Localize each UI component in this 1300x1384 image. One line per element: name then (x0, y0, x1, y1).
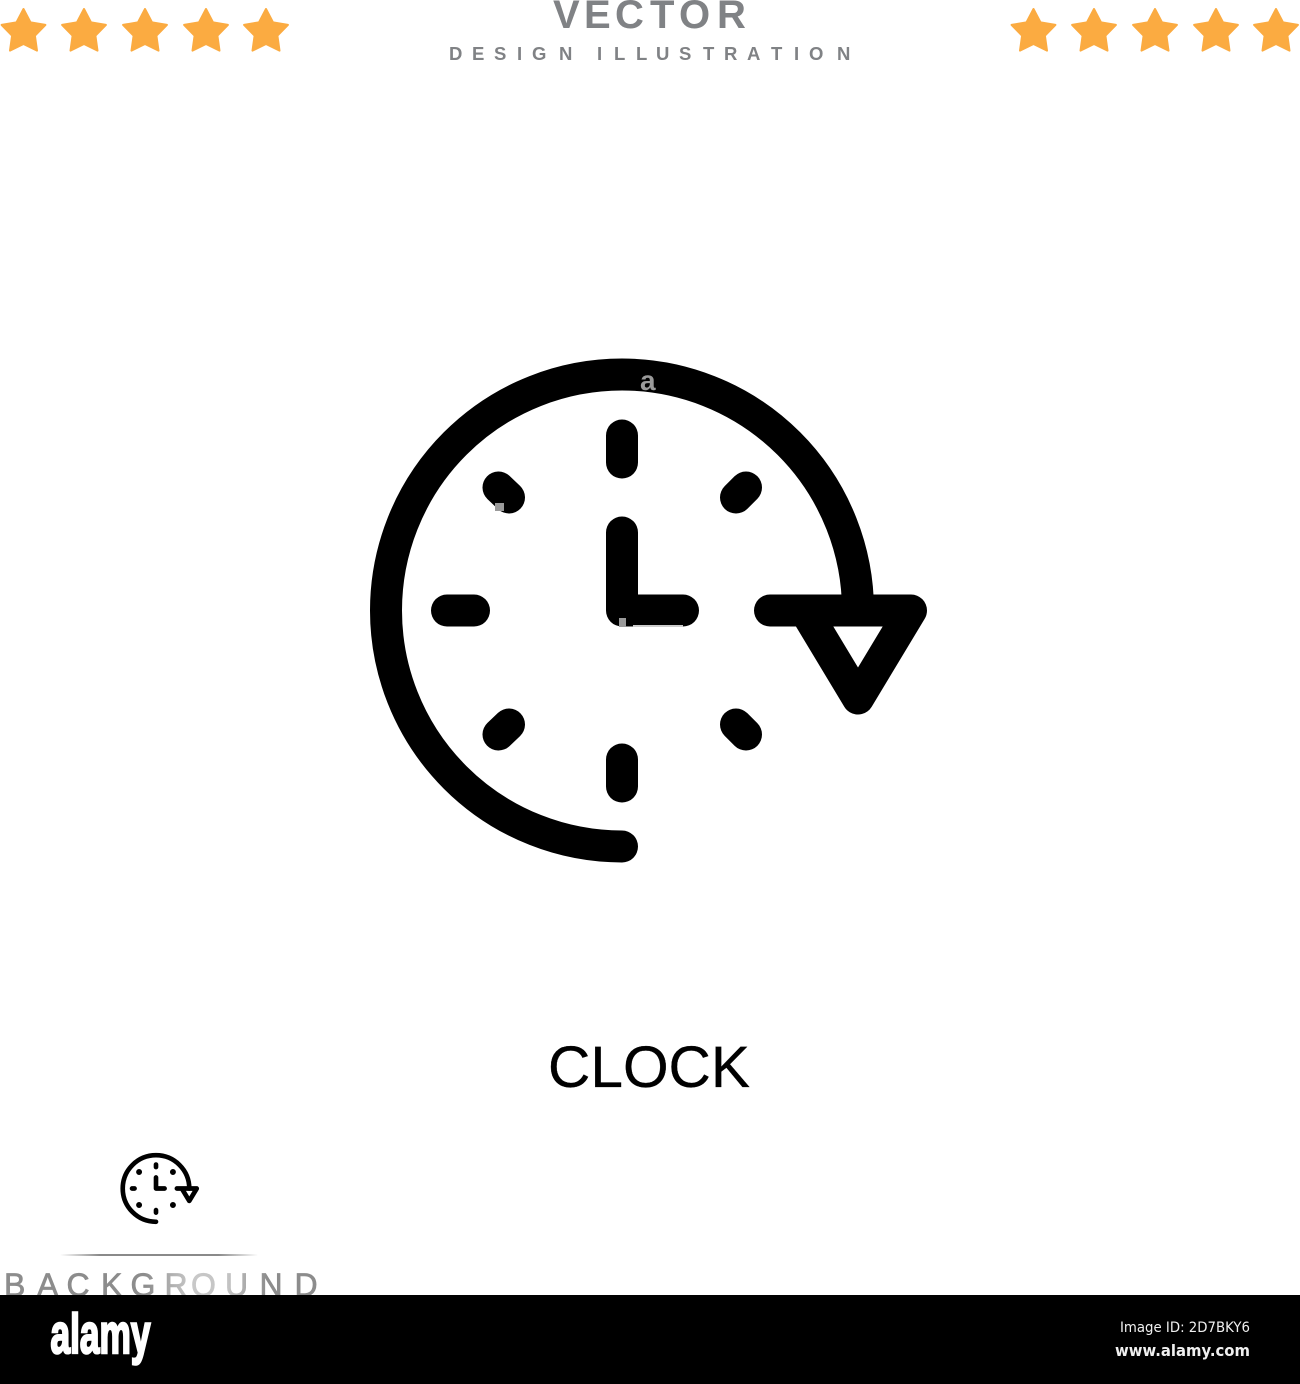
icon: small clock thumbnail (123, 1155, 197, 1222)
word: BACKGROUND: BACKGROUND (4, 1267, 318, 1303)
icon: large clock with clockwise arrow (386, 374, 911, 846)
clock ring arc (386, 374, 858, 846)
left star rating (2, 9, 288, 51)
clock hands (622, 532, 683, 610)
label: CLOCK: CLOCK (548, 1035, 750, 1100)
divider rule above BACKGROUND (60, 1254, 258, 1256)
hour ticks (447, 436, 746, 786)
footer band (0, 1295, 1300, 1384)
watermark remnants on clock (495, 365, 683, 627)
alamy logo: alamy (50, 1302, 150, 1365)
image id: Image ID: 2D7BKY6 (1120, 1320, 1250, 1336)
arrow head (770, 610, 911, 698)
right star rating (1012, 9, 1298, 51)
subheading: DESIGN ILLUSTRATION: DESIGN ILLUSTRATION (449, 43, 850, 64)
watermark remnants on clock: a (640, 365, 656, 396)
website: www.alamy.com (1115, 1341, 1250, 1360)
